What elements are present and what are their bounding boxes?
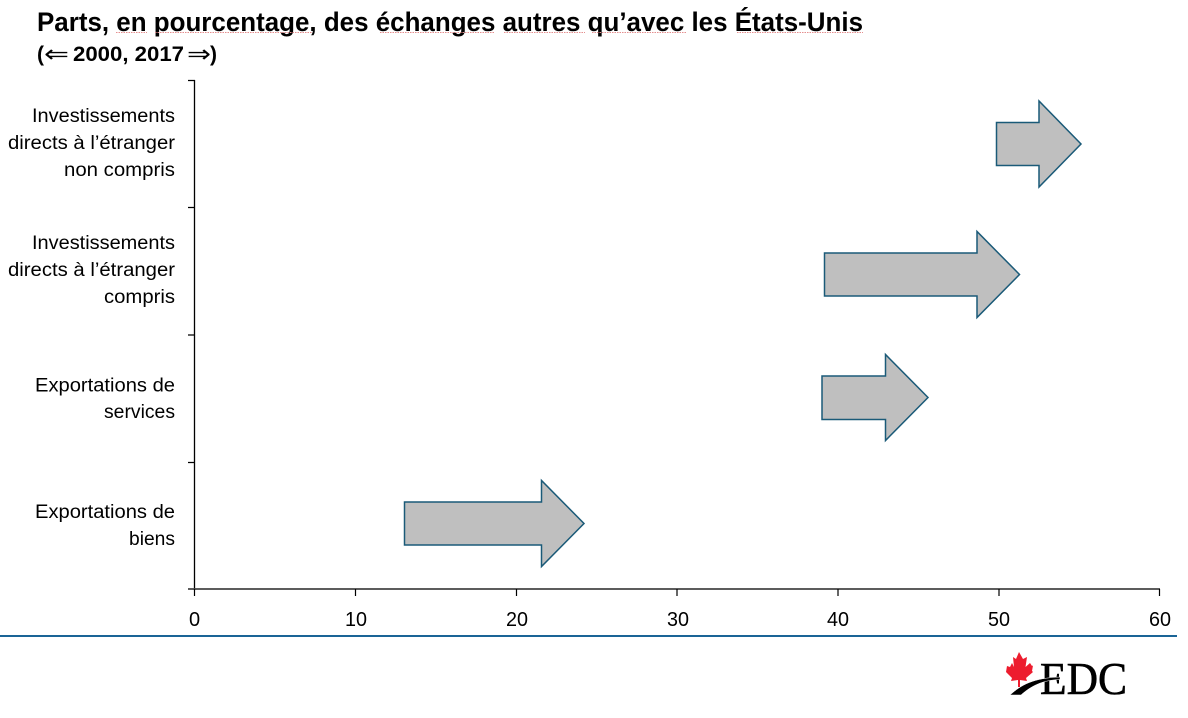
subtitle: arrow legend: 2000, 2017 xyxy=(73,43,184,66)
category label: Exportations de services: services xyxy=(104,402,175,423)
x axis tick labels: 20 xyxy=(506,609,528,631)
icon: maple leaf xyxy=(1006,652,1033,687)
category label: Investissements directs à l'étranger compris: Investissements xyxy=(32,233,175,254)
logo wordmark: EDC xyxy=(1040,654,1127,704)
category label: Investissements directs à l'étranger compris xyxy=(8,233,176,308)
category label: Investissements directs à l'étranger non compris: directs à l’étranger xyxy=(8,133,176,154)
category label: Exportations de biens: Exportations de xyxy=(35,502,175,523)
x axis xyxy=(188,589,1160,596)
category label: Exportations de services xyxy=(35,376,175,423)
x axis tick labels: 0 xyxy=(189,609,200,631)
x axis tick labels: 40 xyxy=(827,609,849,631)
arrow: exportations de services xyxy=(822,354,928,440)
arrow: investissements compris xyxy=(824,232,1020,318)
x axis tick labels: 60 xyxy=(1149,609,1171,631)
logo: EDC xyxy=(1006,652,1127,704)
arrow: exportations de biens xyxy=(404,480,584,566)
category label: Exportations de services: Exportations de xyxy=(35,376,175,396)
category label: Investissements directs à l'étranger compris: directs à l’étranger xyxy=(8,260,176,281)
x axis tick labels: 30 xyxy=(667,609,689,631)
x axis tick labels xyxy=(189,609,1171,631)
y axis xyxy=(188,80,195,590)
category label: Investissements directs à l'étranger non compris xyxy=(8,106,176,181)
arrow: investissements non compris xyxy=(996,101,1081,187)
category label: Investissements directs à l'étranger non compris: Investissements xyxy=(32,106,175,127)
category label: Exportations de biens xyxy=(35,502,175,550)
subtitle: arrow legend: ) xyxy=(210,43,217,66)
category label: Investissements directs à l'étranger compris: compris xyxy=(104,287,175,308)
subtitle: arrow legend: ( xyxy=(37,43,44,66)
title: Parts, en pourcentage, des échanges autres qu’avec les États-Unis xyxy=(37,6,863,37)
category label: Investissements directs à l'étranger non compris: non compris xyxy=(64,160,175,181)
subtitle: arrow legend: ⇒ xyxy=(187,41,211,68)
subtitle: arrow legend: ⇐ xyxy=(44,41,69,68)
footer rule xyxy=(0,635,1177,637)
category label: Exportations de biens: biens xyxy=(129,529,175,550)
x axis tick labels: 50 xyxy=(988,609,1010,631)
subtitle: arrow legend xyxy=(37,41,217,68)
x axis tick labels: 10 xyxy=(345,609,367,631)
icon: swoosh xyxy=(1010,677,1060,695)
